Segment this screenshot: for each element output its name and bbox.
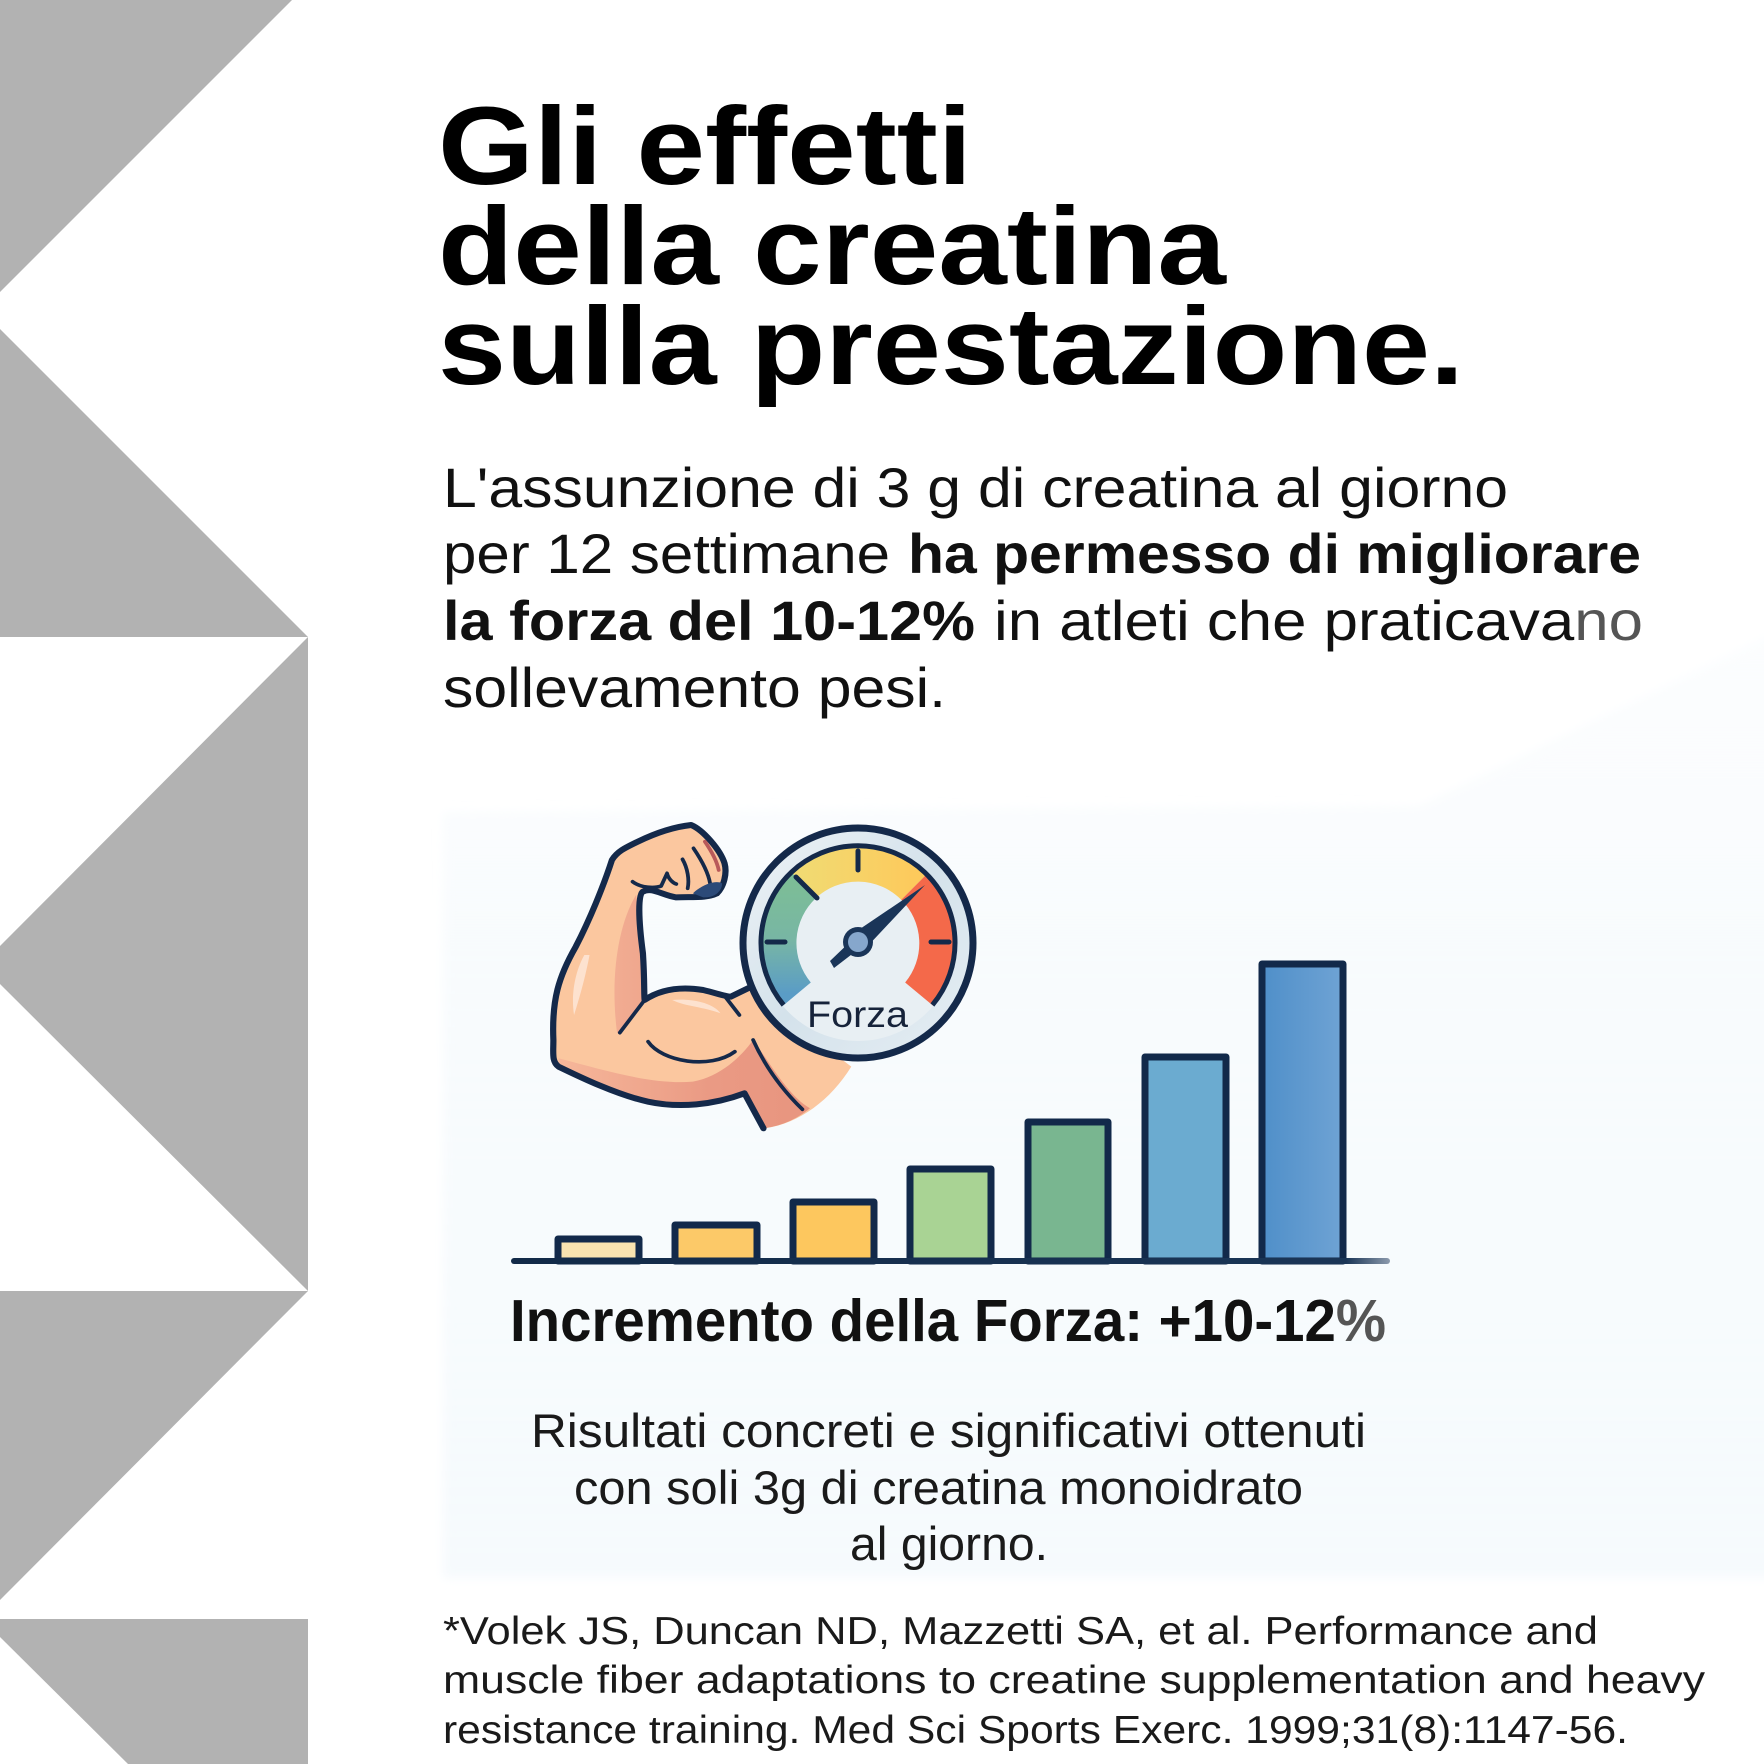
background tint [443,610,1764,1578]
title: della creatina [438,185,1227,308]
icon: flexed arm [553,825,851,1128]
arm shadows [559,895,810,1128]
footnote citation: resistance training. Med Sci Sports Exerc. 1999;31(8):1147-56. [443,1709,1628,1752]
chart caption: Risultati concreti e significativi ottenuti [531,1404,1366,1457]
arm skin [553,825,851,1128]
gauge ticks [767,851,949,942]
gauge needle [830,885,925,968]
bars [558,964,1343,1261]
title: Gli effetti [438,85,972,208]
arm highlights [573,955,720,1015]
gauge hub [843,927,873,957]
zigzag side decoration [0,0,308,1764]
gauge inner ring [761,846,955,1005]
thumb nail [693,882,722,897]
title: sulla prestazione. [438,285,1464,408]
gauge zones [778,864,937,994]
intro paragraph: in atleti che praticava no [994,589,1643,652]
chart headline: Incremento della Forza: +10-12% [510,1288,1386,1354]
chart axis [511,1258,1390,1264]
gauge face [760,845,956,1041]
icon: strength gauge [743,828,973,1058]
footnote citation: muscle fiber adaptations to creatine supplementation and heavy [443,1659,1706,1702]
chart caption: al giorno. [850,1517,1048,1570]
intro paragraph: per 12 settimane [443,522,890,585]
bar chart [511,964,1390,1264]
gauge label: Forza [807,994,908,1035]
chart caption: con soli 3g di creatina monoidrato [574,1461,1303,1514]
intro paragraph [443,456,1643,719]
footnote citation [443,1610,1706,1752]
arm outline [553,825,763,1128]
intro paragraph: ha permesso di migliorare [908,522,1641,585]
intro paragraph: la forza del 10-12% [443,589,975,652]
muscle and finger lines [620,842,802,1109]
intro paragraph: sollevamento pesi. [443,656,946,719]
footnote citation: *Volek JS, Duncan ND, Mazzetti SA, et al. Performance and [443,1610,1598,1653]
gauge rim [743,828,973,1058]
title [438,85,1464,408]
intro paragraph: L'assunzione di 3 g di creatina al giorno [443,456,1508,519]
chart caption [531,1404,1366,1570]
